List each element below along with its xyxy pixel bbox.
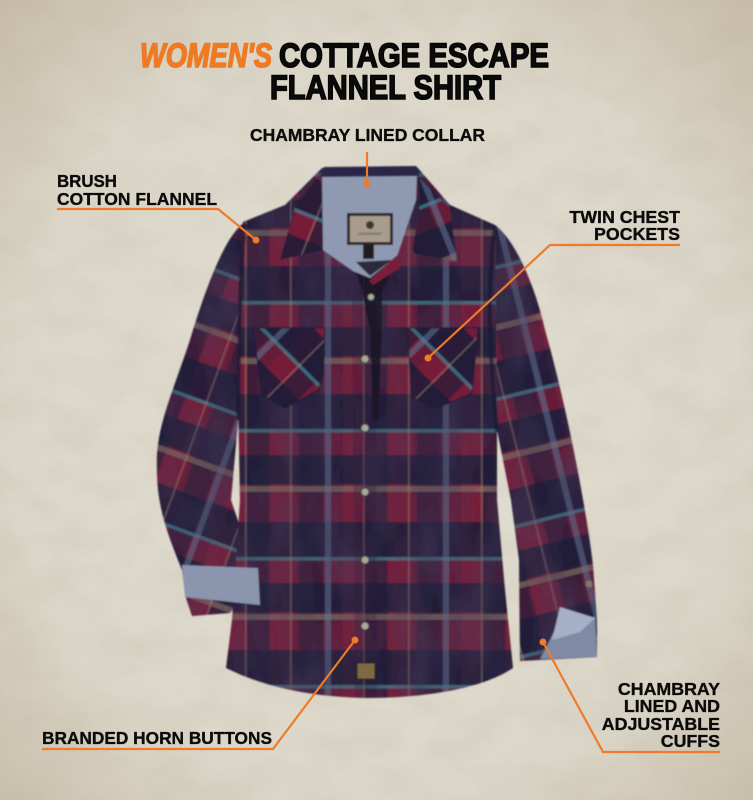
callout: brush cotton flannel: BRUSH bbox=[57, 171, 117, 191]
neck shadow under tag bbox=[356, 260, 392, 276]
left rolled chambray cuff bbox=[182, 565, 260, 605]
title: WOMEN'S bbox=[140, 37, 272, 75]
callout: branded horn buttons: BRANDED HORN BUTTONS bbox=[42, 728, 272, 748]
callout: chambray lined collar: CHAMBRAY LINED COLLAR bbox=[250, 125, 485, 145]
left chest pocket bbox=[253, 328, 325, 408]
leather hem patch bbox=[357, 663, 375, 679]
callout: chambray lined and adjustable cuffs: CHAMBRAY bbox=[618, 679, 720, 699]
right collar flap bbox=[412, 177, 457, 262]
callout: chambray lined and adjustable cuffs: LINED AND bbox=[624, 696, 720, 716]
flannel shirt illustration bbox=[150, 160, 600, 700]
right chest pocket bbox=[407, 328, 478, 408]
right chambray cuff bbox=[540, 580, 597, 659]
callout: branded horn buttons bbox=[42, 636, 358, 749]
right sleeve bbox=[495, 225, 597, 661]
dark neck opening bbox=[352, 256, 398, 420]
collar back band bbox=[320, 166, 420, 177]
fabric mottling bbox=[150, 160, 600, 700]
callout: brush cotton flannel bbox=[57, 171, 260, 244]
callout: twin chest pockets: POCKETS bbox=[594, 224, 680, 244]
callout: chambray lined and adjustable cuffs bbox=[540, 638, 720, 752]
callout: chambray lined collar bbox=[250, 125, 485, 188]
callout: twin chest pockets bbox=[424, 207, 680, 362]
neck label tag bbox=[347, 213, 393, 259]
left collar flap bbox=[280, 173, 323, 260]
left sleeve bbox=[157, 222, 258, 616]
callout: twin chest pockets: TWIN CHEST bbox=[569, 207, 680, 227]
button placket bbox=[352, 275, 377, 697]
callout: chambray lined and adjustable cuffs: ADJUSTABLE bbox=[602, 714, 720, 734]
callout: brush cotton flannel: COTTON FLANNEL bbox=[57, 189, 217, 209]
title: COTTAGE ESCAPE bbox=[279, 37, 549, 75]
title: FLANNEL SHIRT bbox=[270, 69, 501, 107]
shirt buttons bbox=[361, 294, 374, 630]
shirt body bbox=[226, 167, 513, 698]
red inner lapel bbox=[369, 256, 400, 285]
title bbox=[140, 37, 549, 107]
callout: chambray lined and adjustable cuffs: CUFFS bbox=[661, 731, 720, 751]
armhole and side seams bbox=[238, 224, 497, 432]
neck label tag: LEGENDARY bbox=[358, 231, 383, 236]
chambray collar lining bbox=[322, 172, 417, 278]
